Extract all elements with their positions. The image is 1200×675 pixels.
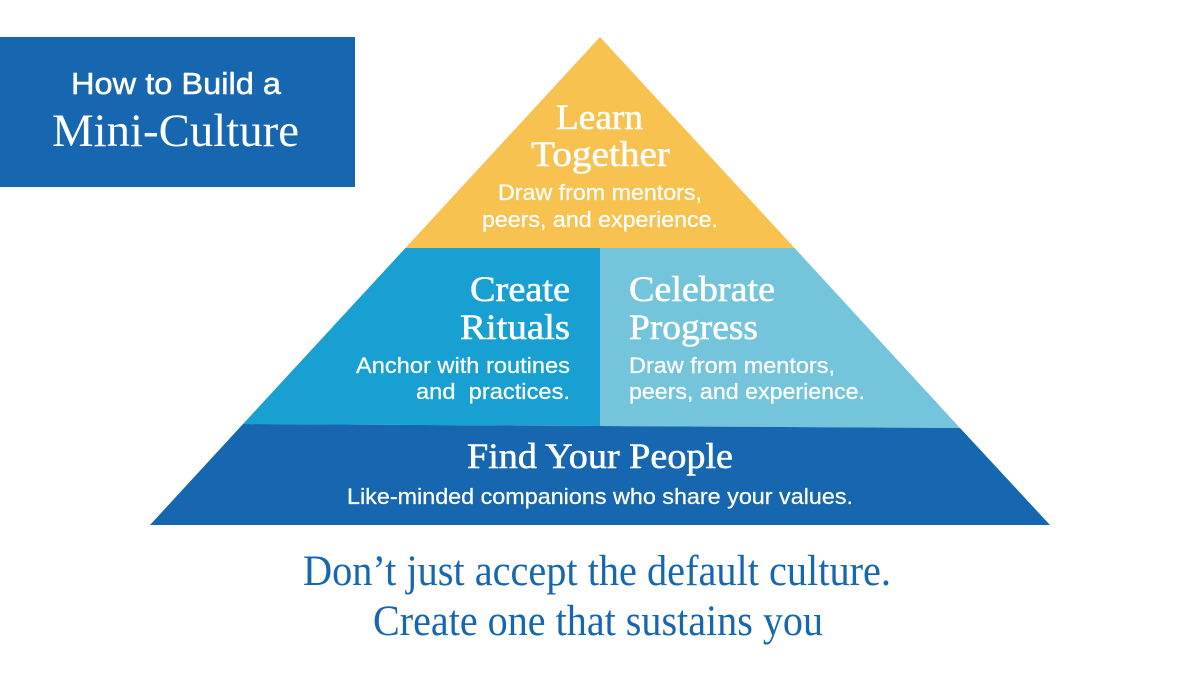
text: Learn Together description: Draw from mentors,	[498, 180, 702, 205]
heading: Celebrate Progress: Celebrate	[629, 269, 775, 309]
closing message: Create one that sustains you	[373, 598, 823, 645]
text: Create Rituals description	[356, 353, 570, 404]
tier: Learn Together	[405, 37, 795, 248]
tier: Celebrate Progress	[600, 248, 960, 428]
text: Create Rituals description: and practices.	[416, 379, 570, 404]
heading: Create Rituals	[460, 269, 570, 347]
text: Learn Together description: peers, and experience.	[482, 207, 718, 232]
heading: Learn Together: Learn	[556, 97, 643, 137]
pyramid	[150, 37, 1050, 525]
closing message	[303, 548, 891, 645]
text: Celebrate Progress description: peers, and experience.	[629, 379, 865, 404]
closing message: Don’t just accept the default culture.	[303, 548, 891, 595]
heading: Find Your People: Find Your People	[467, 436, 733, 476]
heading: Create Rituals: Rituals	[460, 307, 570, 347]
heading: Learn Together: Together	[531, 134, 670, 174]
text: Find Your People description: Like-minded companions who share your values.	[347, 484, 853, 509]
heading: Celebrate Progress	[629, 269, 775, 347]
text: Learn Together description	[482, 180, 718, 232]
title line: How to Build a: How to Build a	[71, 66, 282, 101]
text: Celebrate Progress description	[629, 353, 865, 404]
heading: Learn Together	[531, 97, 670, 174]
heading: Celebrate Progress: Progress	[629, 307, 758, 347]
text: Celebrate Progress description: Draw from mentors,	[629, 353, 835, 378]
title box	[0, 37, 355, 187]
text: Create Rituals description: Anchor with routines	[356, 353, 570, 378]
title line: Mini-Culture: Mini-Culture	[52, 105, 299, 157]
tier: Create Rituals	[243, 248, 600, 426]
tier: Find Your People	[150, 424, 1050, 525]
heading: Create Rituals: Create	[470, 269, 570, 309]
